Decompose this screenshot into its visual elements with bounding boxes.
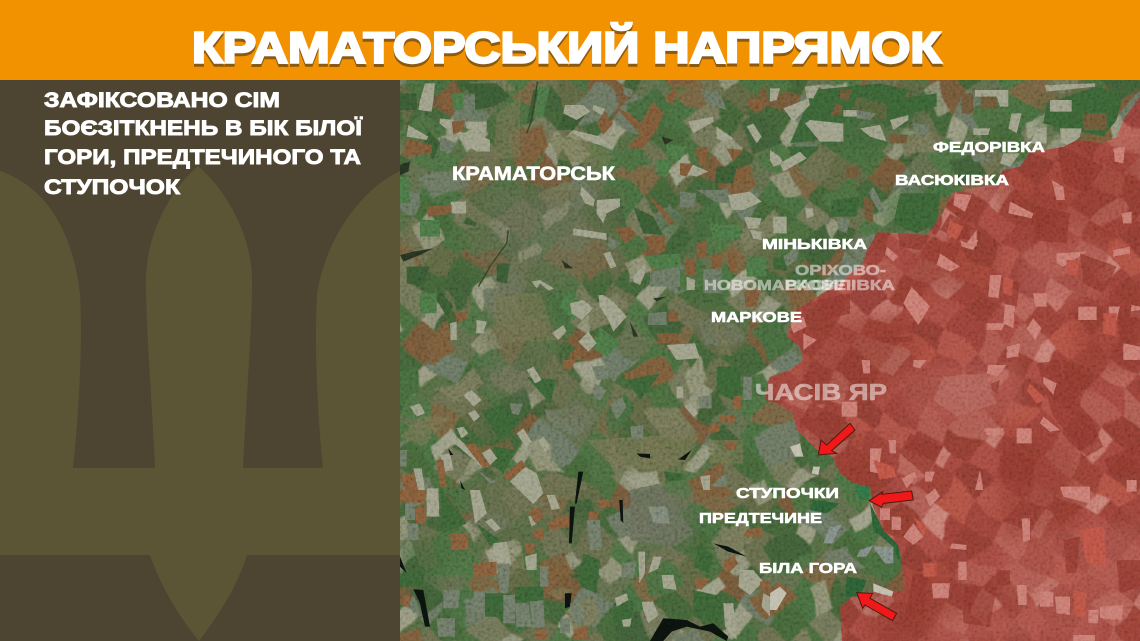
label: Предтечине: ПРЕДТЕЧИНЕ — [699, 510, 822, 527]
label: Васюківка: ВАСЮКІВКА — [895, 172, 1009, 189]
photo grain — [400, 80, 1140, 641]
left panel text: ГОРИ, ПРЕДТЕЧИНОГО ТА — [44, 145, 361, 169]
arrow: toward Біла Гора — [857, 593, 897, 621]
arrow: toward Ступочки north — [818, 423, 855, 455]
label: Оріхово-Василівка: ОРІХОВО- — [795, 262, 886, 279]
left panel text: БОЄЗІТКНЕНЬ В БІК БІЛОЇ — [44, 116, 363, 140]
label: Краматорськ: КРАМАТОРСЬК — [452, 163, 615, 185]
label: Оріхово-Василівка — [785, 262, 895, 294]
left panel text — [44, 88, 363, 199]
olive tint over the unoccupied map — [400, 80, 1140, 641]
map fields: north-east greens — [770, 83, 1123, 270]
occupied territory overlay — [740, 80, 1140, 641]
patchwork second layer — [380, 60, 1140, 641]
red-zone fields: north — [790, 143, 1140, 360]
left panel text: ЗАФІКСОВАНО СІМ — [44, 88, 280, 112]
map fields: north-west — [400, 82, 767, 360]
label: Біла Гора: БІЛА ГОРА — [759, 560, 857, 577]
satellite map — [380, 60, 1140, 641]
map fields: south-west — [400, 360, 770, 640]
water bodies — [400, 448, 747, 641]
label: Федорівка: ФЕДОРІВКА — [933, 139, 1045, 156]
arrow: toward Ступочки east — [869, 491, 913, 507]
green strip along the front line — [770, 443, 900, 610]
label: Часів Яр: ЧАСІВ ЯР — [755, 379, 887, 405]
header bar — [0, 0, 1140, 80]
title: КРАМАТОРСЬКИЙ НАПРЯМОК — [192, 22, 941, 72]
label: Оріхово-Василівка: ВАСИЛІВКА — [785, 277, 895, 294]
label: Маркове: МАРКОВЕ — [711, 309, 802, 326]
label: Міньківка: МІНЬКІВКА — [762, 236, 867, 253]
left panel background — [0, 80, 400, 641]
trident emblem — [0, 166, 400, 641]
left panel text: СТУПОЧОК — [44, 175, 181, 199]
title: КРАМАТОРСЬКИЙ НАПРЯМОК — [192, 24, 941, 76]
label: Ступочки: СТУПОЧКИ — [736, 485, 839, 502]
label: Новомаркове: НОВОМАРКОВЕ — [704, 277, 846, 294]
red-zone fields: south — [800, 360, 1140, 641]
red tone adjustment — [784, 122, 1140, 641]
patchwork base — [380, 60, 1140, 641]
